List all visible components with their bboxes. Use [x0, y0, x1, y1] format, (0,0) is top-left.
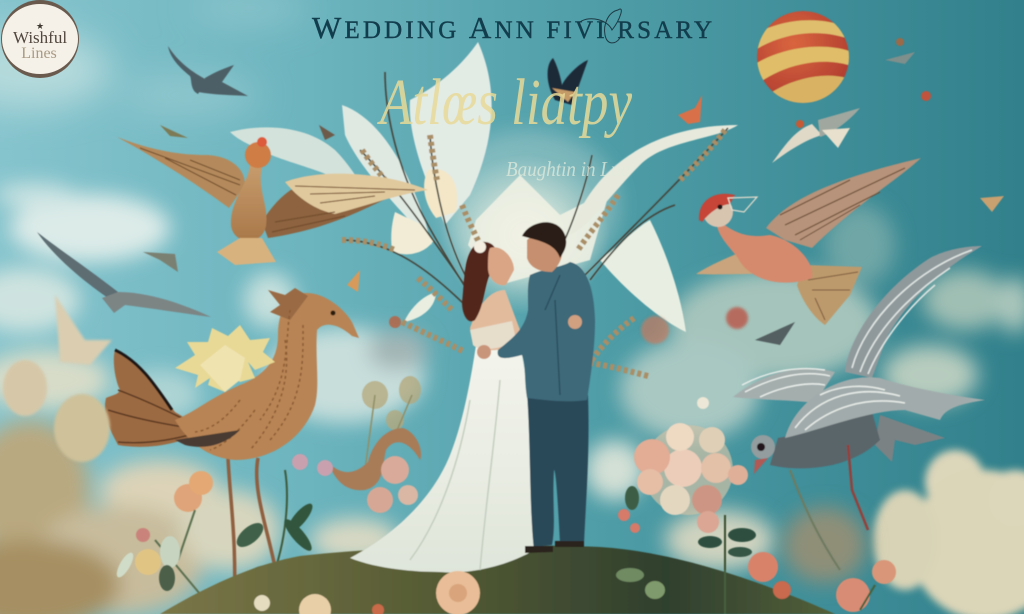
tail [217, 238, 276, 265]
branches [342, 72, 728, 310]
legs [228, 458, 276, 610]
wing right upper [285, 174, 428, 214]
small birds scattered [143, 38, 1004, 345]
background branch flowers left [3, 295, 112, 462]
head [245, 142, 271, 168]
couple [350, 222, 595, 573]
translucent pale haze behind couple [440, 130, 620, 280]
foreground flowers on hill [254, 470, 896, 614]
clouds: right bank [585, 205, 1024, 570]
bride upper body [470, 290, 520, 350]
logo: Wishful Lines badge: Wishful [13, 28, 67, 47]
wing left [117, 137, 245, 208]
petal: left [342, 105, 432, 245]
wing right lower [262, 176, 395, 238]
yellow flower [175, 325, 275, 392]
bride bodice [470, 321, 516, 349]
body [231, 165, 266, 241]
groom head [527, 235, 563, 272]
clouds: lower left sepia [0, 420, 400, 614]
feather: left [230, 127, 372, 200]
petal: peach [424, 169, 457, 218]
bird: red parrot [696, 158, 921, 325]
legs [848, 445, 868, 530]
hair flowers [474, 241, 486, 253]
bird: silver crane [733, 246, 985, 530]
tail fan [105, 350, 205, 447]
leaves on branches [342, 130, 725, 376]
logo: Wishful Lines badge: ★ [36, 21, 44, 31]
groom trousers [525, 395, 589, 547]
script subheading: Baughtin in Lua [506, 157, 630, 181]
left wing [696, 250, 752, 274]
balloon [755, 11, 852, 104]
eye [330, 310, 336, 316]
petal: tall centre [410, 42, 492, 225]
tree of white feathers and petals [230, 42, 738, 376]
dry bush right [783, 507, 867, 583]
feather: right arc [570, 125, 738, 235]
title scribble [580, 9, 621, 43]
small bird: dark centre top [548, 58, 588, 105]
rose bouquet [618, 397, 756, 575]
main wing [785, 377, 985, 438]
script heading: Atlœs liatpy [377, 66, 633, 139]
logo: Wishful Lines badge: Lines [21, 45, 57, 62]
tail feathers [875, 415, 945, 462]
bird: giraffe-patterned fantasy bird with flower [105, 288, 359, 610]
wedding dress [350, 345, 534, 573]
body and neck [175, 293, 359, 460]
wing dark stripe [175, 430, 240, 447]
pink lilies [292, 454, 308, 470]
shoes [525, 541, 584, 553]
clouds: upper left [0, 0, 310, 113]
bird: grey left [37, 232, 211, 317]
petal: lower left cream [391, 212, 434, 254]
bird: golden crane [117, 137, 428, 265]
bride face [488, 247, 514, 285]
left wing [733, 369, 835, 403]
petal: right lower [600, 220, 686, 332]
upward wing [845, 246, 982, 378]
small bird: top right white [772, 108, 860, 163]
groom hair [522, 222, 566, 258]
small flamingo behind couple [328, 428, 421, 490]
neck and head [770, 405, 880, 468]
pattern [195, 310, 303, 450]
body [716, 218, 812, 283]
crest [268, 288, 308, 320]
bird: grey top left [168, 46, 248, 96]
groom jacket [498, 262, 595, 401]
wing [766, 158, 921, 248]
clouds: lower right cream [873, 450, 1024, 614]
lower left roses [174, 484, 202, 512]
title: wedding anniversary: WEDDING ANN FIVI RSARY [312, 10, 712, 45]
clouds: left bank [0, 183, 428, 423]
hill [160, 546, 835, 614]
white glow behind couple [440, 155, 610, 315]
head [703, 197, 733, 227]
background stems and flowers [114, 376, 421, 600]
logo: Wishful Lines badge [1, 0, 79, 78]
hands [477, 345, 491, 359]
tail [797, 265, 862, 325]
bride hair [462, 242, 496, 321]
petals: centre burst [468, 175, 610, 285]
petal: lower small [404, 292, 436, 322]
